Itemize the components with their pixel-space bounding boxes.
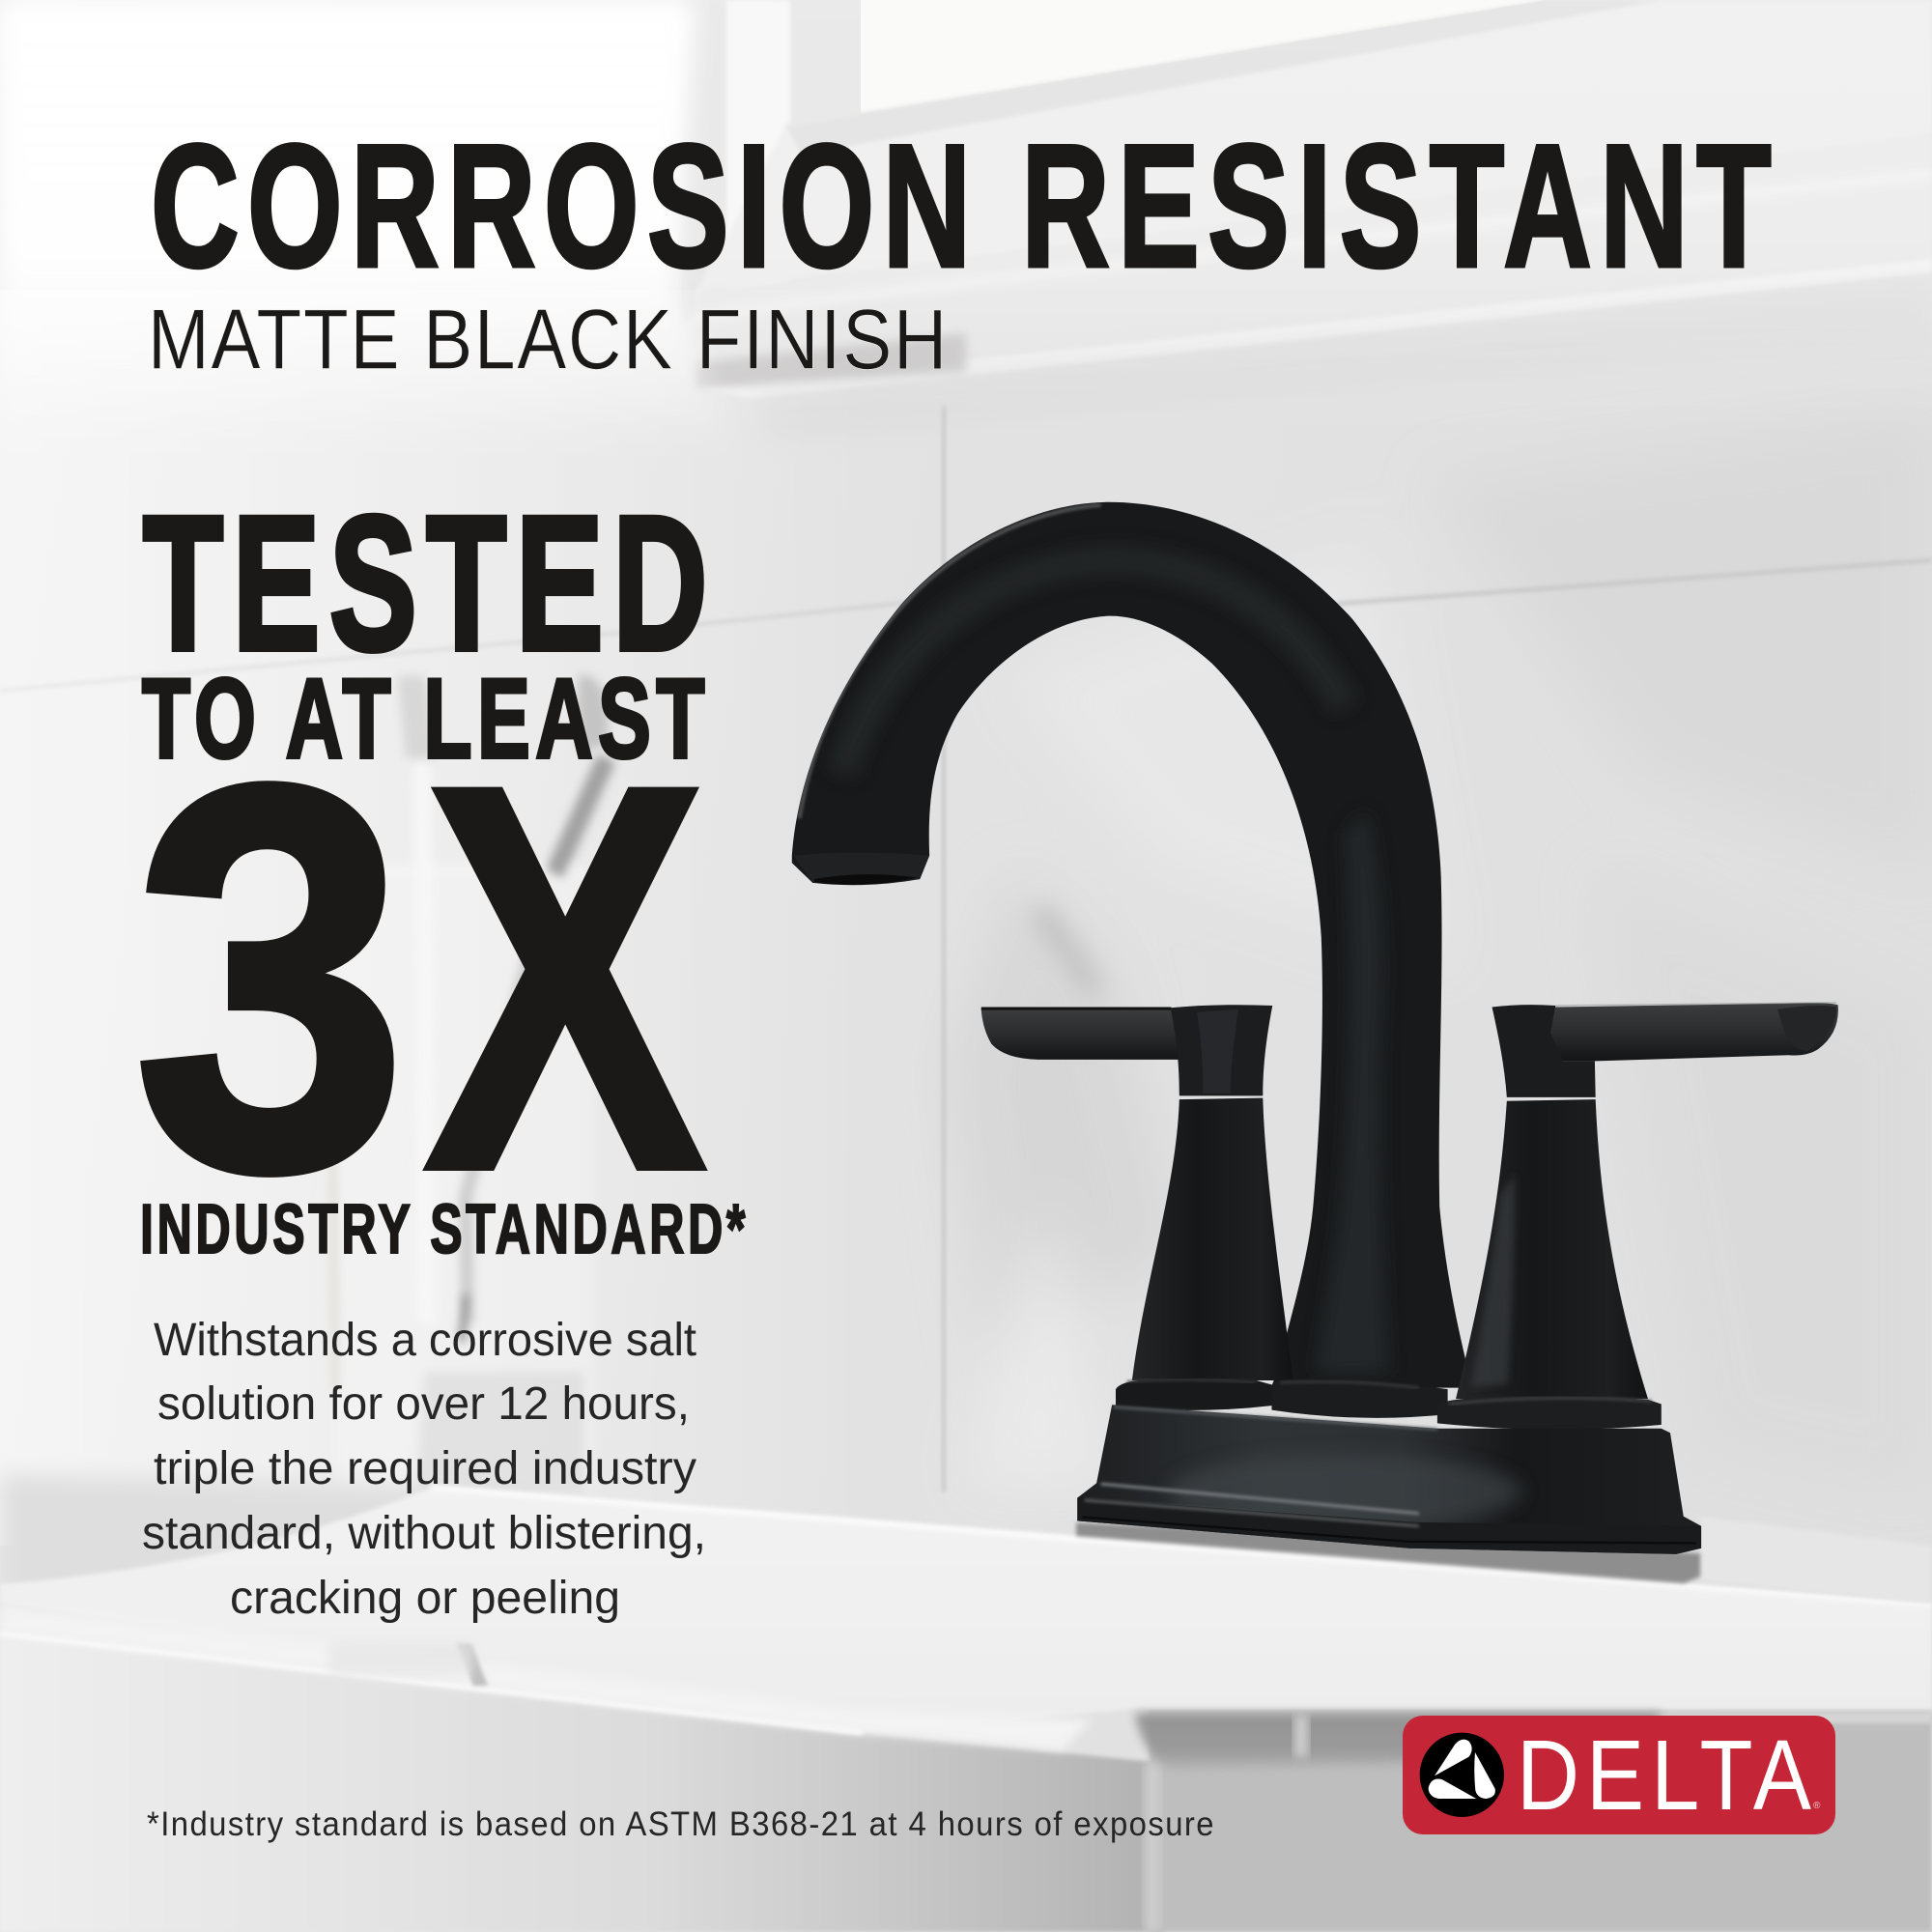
big number: 3X bbox=[133, 672, 708, 1283]
counter: white top bbox=[0, 1488, 1932, 1733]
reflection: glass on lip bbox=[457, 1644, 488, 1686]
wall: faucet cast shadow bbox=[1029, 903, 1106, 997]
blurred toothbrushes and glass bbox=[333, 674, 608, 1492]
window frame, sill and glass bbox=[681, 0, 1932, 440]
headline: industry standard: INDUSTRY STANDARD* bbox=[140, 1191, 749, 1268]
body text: triple the required industry bbox=[154, 1443, 696, 1494]
subtitle: MATTE BLACK FINISH bbox=[148, 292, 949, 386]
faucet: spout tip bbox=[793, 853, 929, 885]
faucet: right handle bbox=[1456, 1003, 1838, 1399]
counter: right-hand back surface bbox=[1700, 1517, 1932, 1604]
body text bbox=[142, 1315, 706, 1624]
faucet: left handle bbox=[981, 1005, 1293, 1380]
footnote: *Industry standard is based on ASTM B368-21 at 4 hours of exposure bbox=[147, 1805, 1215, 1843]
logo wordmark: DELTA bbox=[1517, 1719, 1818, 1831]
registered mark: ® bbox=[1813, 1801, 1821, 1811]
reflection: faucet base on counter bbox=[1076, 1522, 1700, 1583]
wall tile lines bbox=[0, 406, 1932, 1492]
logo: Delta bbox=[1403, 1716, 1835, 1834]
counter: front face bbox=[0, 1634, 1164, 1932]
icon: Delta triangle mark bbox=[1420, 1733, 1504, 1817]
big number: 3X: 3 bbox=[133, 672, 408, 1283]
faucet bbox=[792, 502, 1838, 1554]
faucet: base plate bbox=[1077, 1405, 1701, 1554]
faucet: base moulding highlights bbox=[1101, 1484, 1419, 1514]
top and left white veil bbox=[0, 0, 1932, 435]
counter: right lower face bbox=[1150, 1712, 1932, 1932]
faucet: spout and neck bbox=[792, 502, 1474, 1388]
body text: standard, without blistering, bbox=[142, 1508, 706, 1559]
headline: to at least: TO AT LEAST bbox=[142, 655, 710, 781]
body text: cracking or peeling bbox=[230, 1573, 620, 1624]
big number: 3X: X bbox=[424, 672, 708, 1283]
counter: back basin area bbox=[0, 1474, 966, 1700]
counter: bright front edge highlight bbox=[431, 1488, 1932, 1605]
counter: light lip bbox=[0, 1604, 1092, 1750]
body text: solution for over 12 hours, bbox=[157, 1378, 690, 1430]
wall shading: soft tile reflections bbox=[947, 415, 1932, 1497]
body text: Withstands a corrosive salt bbox=[154, 1315, 696, 1366]
reflection: faucet in counter front bbox=[1135, 1713, 1662, 1770]
faucet: base grey sheen bbox=[1077, 1455, 1701, 1554]
headline: tested: TESTED bbox=[143, 476, 717, 690]
faucet: right body highlight bbox=[1470, 1174, 1515, 1388]
faucet: base top highlight bbox=[1114, 1407, 1437, 1429]
faucet: spout and neck shading bbox=[799, 505, 1389, 1373]
faucet: mounting rings bbox=[1116, 1378, 1662, 1430]
